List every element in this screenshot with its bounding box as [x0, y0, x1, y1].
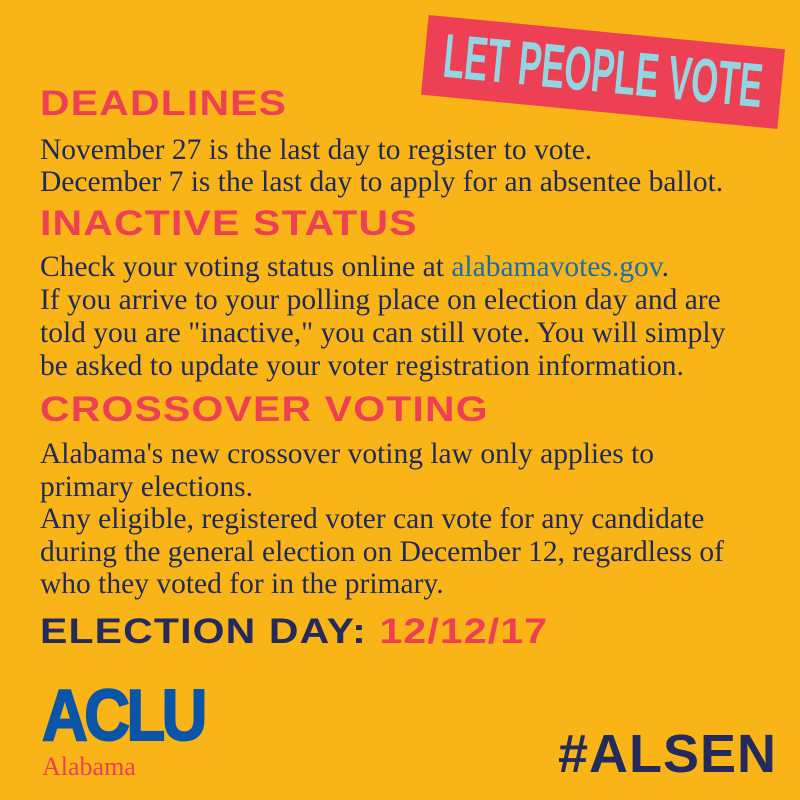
heading: inactive status: INACTIVE STATUS [40, 204, 418, 243]
text: crossover voting: primary elections. [40, 470, 253, 502]
text: crossover voting: during the general election on December 12, regardless of [40, 536, 724, 568]
text: inactive status: If you arrive to your polling place on election day and are [40, 284, 721, 316]
hashtag: #ALSEN [558, 724, 777, 784]
text: inactive status: told you are "inactive," you can still vote. You will simply [40, 317, 725, 349]
text: deadlines: December 7 is the last day to apply for an absentee ballot. [40, 166, 723, 198]
heading: deadlines: DEADLINES [40, 84, 287, 123]
logo: ACLU Alabama: Alabama [42, 752, 136, 781]
text: inactive status [40, 251, 726, 382]
text: deadlines: November 27 is the last day to register to vote. [40, 134, 592, 166]
text: inactive status: Check your voting status online at alabamavotes.gov. [40, 251, 669, 283]
logo: ACLU Alabama: ACLU [42, 676, 204, 756]
badge: let people vote: LET PEOPLE VOTE [440, 22, 766, 121]
text: crossover voting: who they voted for in the primary. [40, 568, 444, 600]
heading: crossover voting: CROSSOVER VOTING [40, 390, 489, 429]
heading: election day: ELECTION DAY: 12/12/17 [40, 612, 548, 651]
text: deadlines [40, 134, 723, 198]
text: crossover voting: Any eligible, registered voter can vote for any candidate [40, 503, 704, 535]
text: inactive status: be asked to update your voter registration information. [40, 350, 684, 382]
text: crossover voting: Alabama's new crossover voting law only applies to [40, 438, 654, 470]
text: crossover voting [40, 438, 724, 600]
